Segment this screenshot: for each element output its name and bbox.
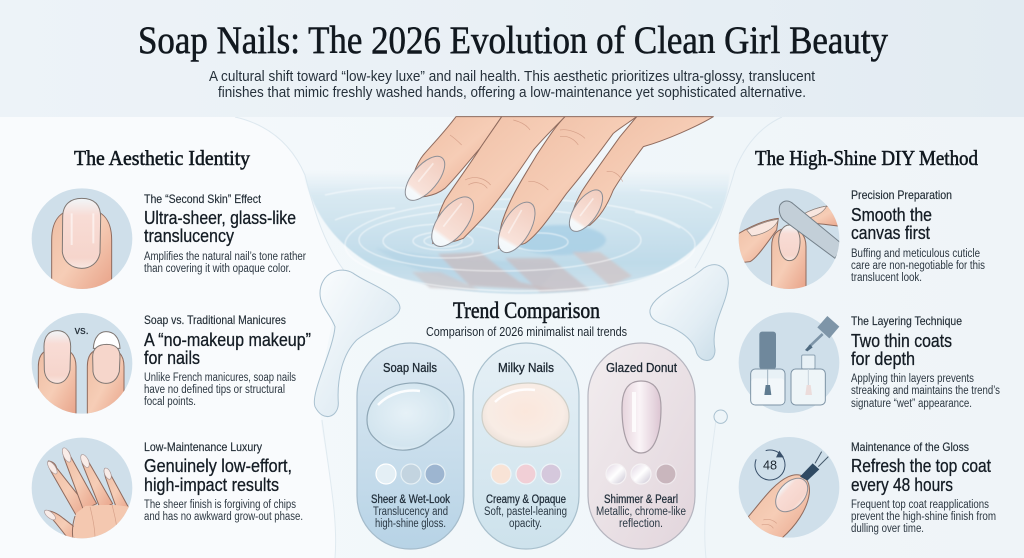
- fingers: [398, 117, 713, 258]
- text: soap vs traditional: for nails: [144, 347, 200, 368]
- text: soap vs traditional: have no defined tips or structural: [144, 384, 285, 396]
- text: precision preparation: Smooth the: [851, 204, 932, 225]
- text: soap vs traditional: focal points.: [144, 396, 196, 408]
- panel: soap nails: Translucency and: [373, 506, 448, 518]
- text: low-maintenance luxury: and has no awkward grow-out phase.: [144, 511, 303, 523]
- panel: soap nails: high-shine gloss.: [375, 518, 446, 530]
- text: soap vs traditional: Unlike French manicures, soap nails: [144, 372, 296, 384]
- header band: [0, 0, 1024, 117]
- icon: sheer nail close-up: [32, 188, 132, 290]
- text: maintenance of the gloss: every 48 hours: [851, 474, 953, 495]
- text: second skin effect: than covering it with opaque color.: [144, 263, 291, 275]
- icon: 48 hour refresh: 48: [763, 459, 777, 473]
- text: second skin effect: [144, 192, 306, 275]
- section: trend comparison: [314, 265, 728, 549]
- text: second skin effect: translucency: [144, 225, 235, 246]
- text: maintenance of the gloss: Maintenance of the Gloss: [851, 440, 969, 454]
- panel: soap nails: Soap Nails: [383, 360, 437, 375]
- water with ripples: [303, 170, 730, 294]
- text: precision preparation: Buffing and meticulous cuticle: [851, 248, 980, 260]
- text: low-maintenance luxury: high-impact results: [144, 474, 279, 495]
- heading: the aesthetic identity: The Aesthetic Identity: [74, 146, 250, 170]
- text: low-maintenance luxury: [144, 440, 303, 523]
- panel: soap nails: Sheer & Wet-Look: [371, 494, 450, 506]
- panel: milky nails: Milky Nails: [498, 360, 554, 375]
- text: maintenance of the gloss: dulling over time.: [851, 523, 924, 535]
- text: low-maintenance luxury: Genuinely low-effort,: [144, 455, 292, 476]
- text: maintenance of the gloss: [851, 440, 996, 535]
- hero illustration: hand touching water: [303, 117, 730, 294]
- heading: trend comparison: Trend Comparison: [453, 298, 600, 323]
- text: maintenance of the gloss: Refresh the top coat: [851, 455, 991, 476]
- text: layering technique: Applying thin layers prevents: [851, 373, 974, 385]
- text: layering technique: for depth: [851, 348, 915, 369]
- panel: soap nails: [357, 343, 464, 549]
- icon: relaxed hand: [32, 438, 134, 543]
- panel: milky nails: [473, 343, 579, 549]
- soap droplets: [314, 265, 728, 423]
- icon: 48 hour refresh: [739, 437, 839, 543]
- text: second skin effect: Amplifies the natural nail’s tone rather: [144, 251, 306, 263]
- text: layering technique: streaking and maintains the trend’s: [851, 385, 1000, 397]
- subheading: Comparison of 2026 minimalist nail trends: [426, 325, 627, 339]
- text: soap vs traditional: A “no-makeup makeup”: [144, 329, 311, 350]
- icon: filing a nail: [733, 188, 843, 290]
- panel: milky nails: opacity.: [509, 518, 542, 530]
- subtitle: [209, 68, 816, 101]
- heading: the high-shine diy method: The High-Shine DIY Method: [755, 146, 978, 170]
- panel: glazed donut: [588, 343, 695, 549]
- icon: soap vs french nails: [32, 313, 132, 417]
- text: second skin effect: Ultra-sheer, glass-like: [144, 207, 296, 228]
- text: maintenance of the gloss: prevent the high-shine finish from: [851, 511, 996, 523]
- text: layering technique: The Layering Technique: [851, 314, 962, 328]
- panel: glazed donut: Metallic, chrome-like: [596, 506, 686, 518]
- section: the aesthetic identity: [32, 146, 311, 543]
- text: layering technique: Two thin coats: [851, 330, 952, 351]
- text: low-maintenance luxury: Low-Maintenance Luxury: [144, 440, 262, 454]
- text: soap vs traditional: [144, 313, 311, 408]
- subtitle: finishes that mimic freshly washed hands, offering a low-maintenance yet sophisticated alternative.: [218, 84, 806, 101]
- text: maintenance of the gloss: Frequent top coat reapplications: [851, 499, 989, 511]
- icon: soap vs french nails: vs.: [75, 325, 89, 337]
- icon: polish bottles: [739, 312, 839, 413]
- text: precision preparation: translucent look.: [851, 272, 922, 284]
- title: Soap Nails: The 2026 Evolution of Clean Girl Beauty: [138, 19, 888, 62]
- panel: milky nails: Creamy & Opaque: [486, 494, 566, 506]
- text: precision preparation: Precision Preparation: [851, 188, 952, 202]
- text: precision preparation: canvas first: [851, 222, 930, 243]
- text: precision preparation: care are non-negotiable for this: [851, 260, 985, 272]
- section: the high-shine diy method: [733, 146, 1000, 543]
- text: precision preparation: [851, 188, 985, 284]
- text: soap vs traditional: Soap vs. Traditional Manicures: [144, 313, 286, 327]
- panel: glazed donut: reflection.: [619, 518, 663, 530]
- text: layering technique: signature “wet” appearance.: [851, 398, 972, 410]
- panel: glazed donut: Glazed Donut: [606, 360, 677, 375]
- subtitle: A cultural shift toward “low-key luxe” and nail health. This aesthetic prioritizes ultra-glossy, translucent: [209, 68, 816, 85]
- text: low-maintenance luxury: The sheer finish is forgiving of chips: [144, 499, 296, 511]
- text: second skin effect: The “Second Skin” Effect: [144, 192, 262, 206]
- panel: milky nails: Soft, pastel-leaning: [484, 506, 567, 518]
- text: layering technique: [851, 314, 1000, 410]
- panel: glazed donut: Shimmer & Pearl: [604, 494, 678, 506]
